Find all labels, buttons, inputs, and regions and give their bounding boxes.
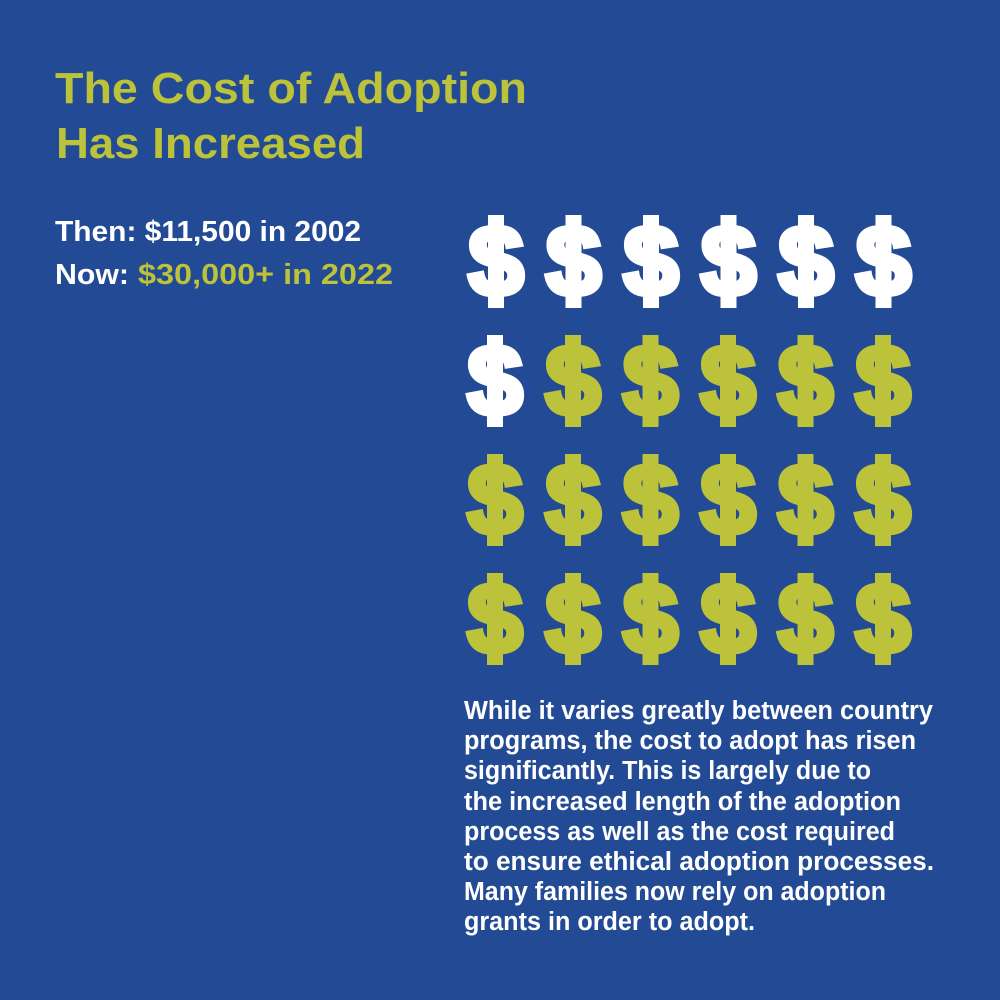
row 1: $ bbox=[700, 206, 757, 318]
then and now cost comparison: Then: $11,500 in 2002 bbox=[55, 216, 361, 248]
row 4: $ bbox=[777, 564, 834, 676]
row 3: $ bbox=[467, 444, 523, 556]
body paragraph: programs, the cost to adopt has risen bbox=[464, 727, 916, 755]
then and now cost comparison: $30,000+ in 2022 bbox=[138, 259, 393, 291]
row 1: $ bbox=[778, 206, 834, 318]
row 2: $ bbox=[777, 326, 834, 438]
row 4: $ bbox=[545, 564, 601, 676]
row 2 bbox=[467, 326, 911, 438]
title: The Cost of Adoption bbox=[55, 64, 527, 113]
row 3: $ bbox=[622, 444, 679, 556]
row 1 bbox=[468, 206, 912, 318]
row 3: $ bbox=[855, 444, 911, 556]
row 4 bbox=[467, 564, 911, 676]
then and now cost comparison bbox=[55, 216, 393, 291]
title bbox=[55, 64, 527, 168]
row 4: $ bbox=[622, 564, 679, 676]
row 2: $ bbox=[855, 326, 911, 438]
row 3: $ bbox=[700, 444, 756, 556]
row 4: $ bbox=[467, 564, 523, 676]
title: Has Increased bbox=[56, 119, 365, 168]
row 1: $ bbox=[468, 206, 524, 318]
body paragraph: Many families now rely on adoption bbox=[464, 878, 886, 906]
row 1: $ bbox=[855, 206, 912, 318]
row 4: $ bbox=[700, 564, 756, 676]
row 1: $ bbox=[623, 206, 679, 318]
dollar sign grid: 7 white of 24 bbox=[467, 206, 912, 676]
row 3: $ bbox=[545, 444, 601, 556]
row 2: $ bbox=[700, 326, 756, 438]
row 2: $ bbox=[622, 326, 679, 438]
body paragraph: While it varies greatly between country bbox=[464, 697, 934, 725]
row 3: $ bbox=[777, 444, 834, 556]
row 2: $ bbox=[545, 326, 601, 438]
body paragraph: process as well as the cost required bbox=[464, 818, 895, 846]
row 4: $ bbox=[855, 564, 911, 676]
row 1: $ bbox=[545, 206, 602, 318]
then and now cost comparison: Now: bbox=[55, 259, 129, 291]
row 2: $ bbox=[467, 326, 523, 438]
body paragraph: significantly. This is largely due to bbox=[464, 757, 871, 785]
body paragraph: the increased length of the adoption bbox=[464, 788, 901, 816]
row 3 bbox=[467, 444, 911, 556]
body paragraph: to ensure ethical adoption processes. bbox=[464, 848, 934, 876]
body paragraph: grants in order to adopt. bbox=[464, 908, 755, 936]
body paragraph bbox=[464, 697, 934, 936]
